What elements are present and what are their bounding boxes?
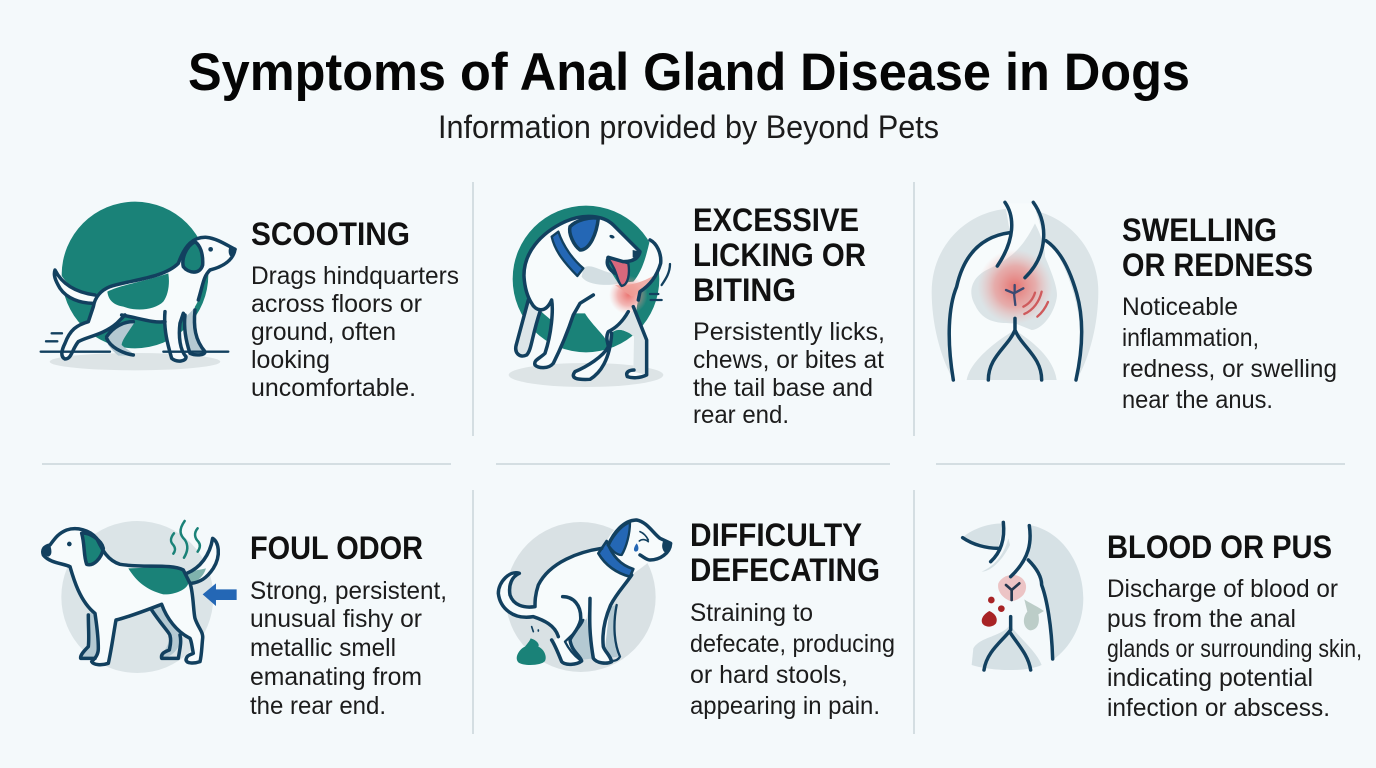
text: foul odor description: Strong, persistent,: [250, 577, 447, 605]
panel: swelling or redness: [932, 202, 1337, 414]
panel: blood or pus: [962, 522, 1362, 722]
text: scooting description: across floors or: [251, 290, 422, 318]
text: foul odor description: unusual fishy or: [250, 605, 422, 633]
heading: difficulty defecating: DIFFICULTY: [690, 517, 862, 553]
text: difficulty description: or hard stools,: [690, 661, 848, 689]
heading: excessive licking or biting: [693, 202, 866, 308]
icon: swollen inflamed anus: [932, 202, 1098, 380]
text: licking description: the tail base and: [693, 374, 873, 402]
text: scooting description: ground, often: [251, 318, 396, 346]
text: difficulty description: appearing in pain.: [690, 692, 880, 720]
heading: scooting: SCOOTING: [251, 216, 410, 252]
text: blood or pus description: indicating potential: [1107, 664, 1313, 692]
text: scooting description: [251, 262, 459, 402]
text: licking description: [693, 318, 885, 429]
heading: excessive licking or biting: LICKING OR: [693, 237, 866, 273]
text: licking description: rear end.: [693, 401, 789, 429]
heading: swelling or redness: SWELLING: [1122, 212, 1277, 248]
heading: foul odor: FOUL ODOR: [250, 530, 423, 566]
panel: excessive licking or biting: [509, 202, 885, 429]
title: Symptoms of Anal Gland Disease in Dogs: [188, 43, 1190, 102]
heading: swelling or redness: OR REDNESS: [1122, 247, 1313, 283]
icon: dog licking rear: [509, 206, 670, 387]
panel: scooting: [41, 202, 459, 402]
text: swelling description: Noticeable: [1122, 293, 1238, 321]
text: scooting description: uncomfortable.: [251, 374, 416, 402]
text: blood or pus description: pus from the anal: [1107, 605, 1296, 633]
icon: scooting dog: [41, 202, 236, 370]
heading: difficulty defecating: DEFECATING: [690, 552, 880, 588]
subtitle: Information provided by Beyond Pets: [438, 109, 939, 145]
text: scooting description: looking: [251, 346, 330, 374]
heading: excessive licking or biting: EXCESSIVE: [693, 202, 859, 238]
panel: difficulty defecating: [498, 517, 895, 720]
text: difficulty description: Straining to: [690, 599, 813, 627]
heading: blood or pus: BLOOD OR PUS: [1107, 529, 1332, 565]
text: blood or pus description: infection or abscess.: [1107, 694, 1330, 722]
text: swelling description: redness, or swelling: [1122, 355, 1337, 383]
text: licking description: Persistently licks,: [693, 318, 885, 346]
icon: stool: [517, 638, 546, 665]
text: blood or pus description: [1107, 575, 1362, 722]
text: foul odor description: metallic smell: [250, 634, 396, 662]
text: blood or pus description: Discharge of blood or: [1107, 575, 1338, 603]
text: swelling description: inflammation,: [1122, 324, 1259, 352]
text: licking description: chews, or bites at: [693, 346, 884, 374]
text: difficulty description: defecate, producing: [690, 630, 895, 658]
text: swelling description: near the anus.: [1122, 386, 1273, 414]
icon: dog with odor and arrow: [42, 521, 237, 673]
icon: anal gland discharge: [962, 522, 1083, 670]
heading: difficulty defecating: [690, 517, 880, 588]
heading: swelling or redness: [1122, 212, 1313, 283]
text: foul odor description: emanating from: [250, 663, 422, 691]
icon: straining dog with stool: [498, 520, 672, 672]
panel: foul odor: [42, 521, 447, 720]
text: difficulty description: [690, 599, 895, 720]
text: foul odor description: [250, 577, 447, 720]
text: scooting description: Drags hindquarters: [251, 262, 459, 290]
text: swelling description: [1122, 293, 1337, 414]
heading: excessive licking or biting: BITING: [693, 272, 796, 308]
text: foul odor description: the rear end.: [250, 692, 386, 720]
